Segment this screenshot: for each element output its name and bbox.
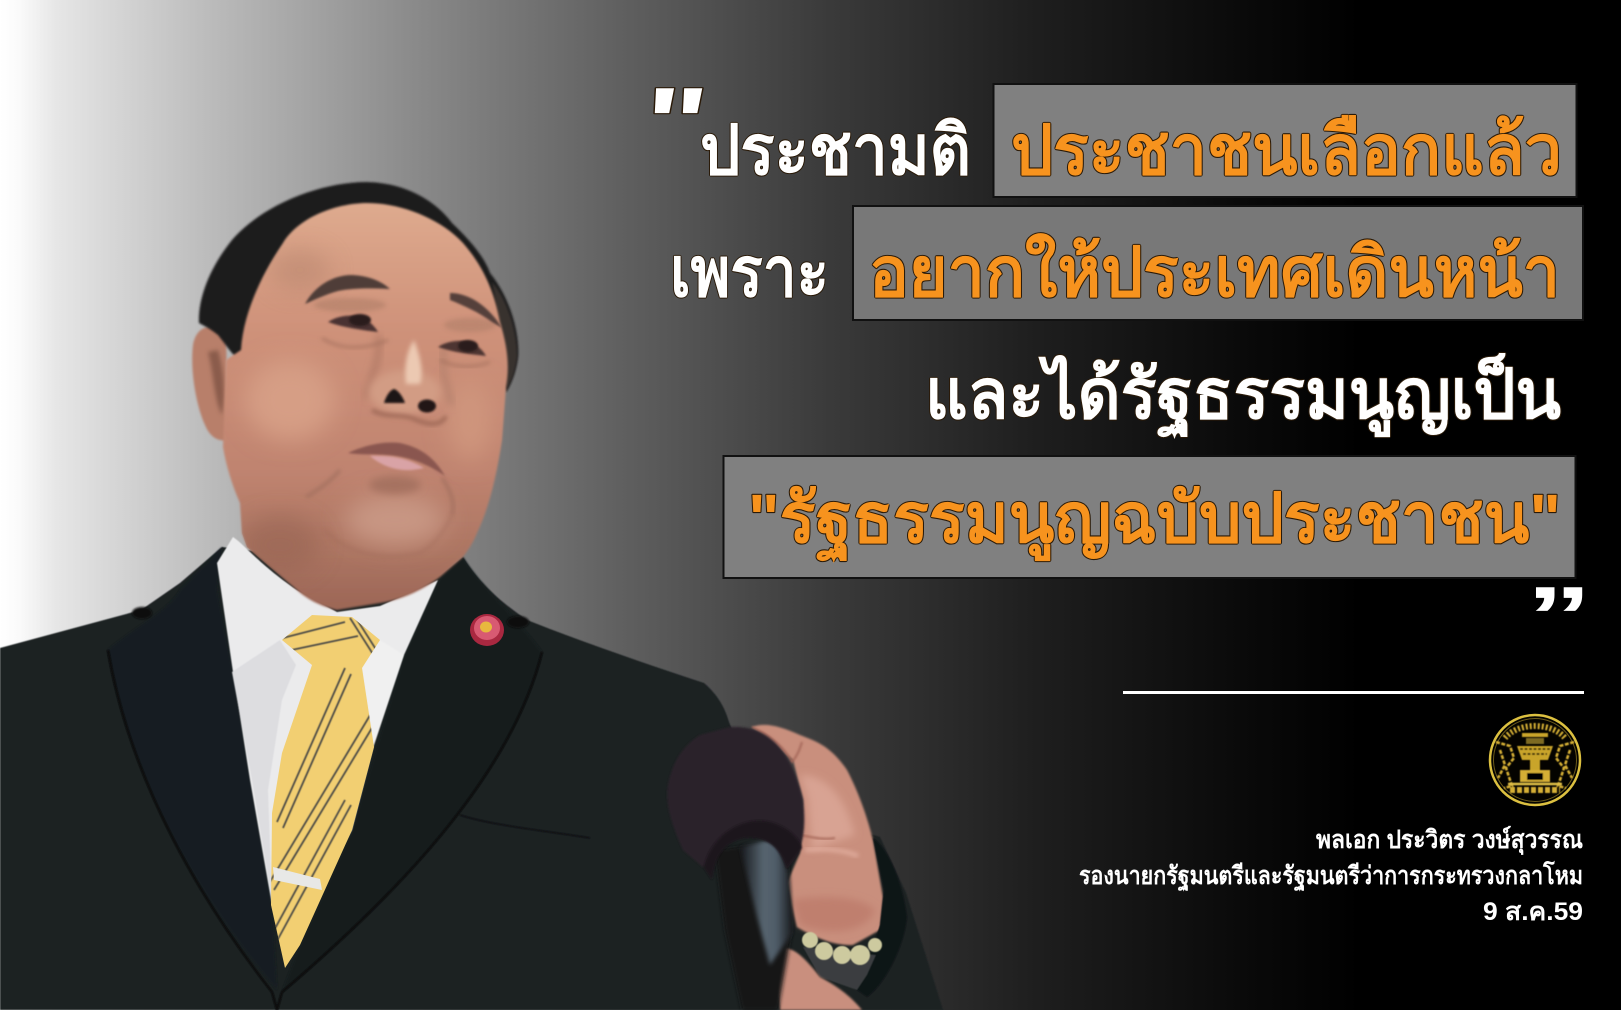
microphone handle <box>715 840 792 1010</box>
highlight box 2 <box>853 206 1583 320</box>
portrait photo of the speaker <box>0 182 943 1010</box>
seal: lions <box>1496 742 1574 788</box>
eye sockets <box>314 298 386 312</box>
icon: government seal <box>1490 715 1580 805</box>
nose <box>369 340 446 424</box>
nose side <box>366 335 379 398</box>
attribution <box>1079 825 1583 926</box>
facial shading <box>240 250 496 575</box>
highlighted phrase 1: ประชาชนเลือกแล้ว <box>1011 112 1562 189</box>
hand holding microphone <box>752 725 883 945</box>
hair <box>199 182 518 392</box>
highlighted phrase 3: "รัฐธรรมนูญฉบับประชาชน" <box>748 480 1561 563</box>
seal: top leaf arc <box>1505 726 1565 738</box>
shirt collar <box>217 537 438 930</box>
ear <box>192 326 228 440</box>
jaw crease <box>325 515 452 556</box>
cheek fold <box>306 470 340 497</box>
chin shadow below lip <box>369 476 421 494</box>
opening quotation mark: " <box>636 67 714 179</box>
lapel pin <box>470 614 504 646</box>
mouth <box>348 442 445 476</box>
closing quotation mark: ” <box>1526 569 1592 663</box>
necktie <box>266 615 384 968</box>
divider line <box>1123 691 1584 694</box>
headline quote <box>636 67 1592 663</box>
line 2 plain text: เพราะ <box>670 234 829 311</box>
tie clip <box>273 867 322 890</box>
face <box>223 203 508 610</box>
microphone <box>667 727 804 1010</box>
line 3 plain text: และได้รัฐธรรมนูญเป็น <box>925 353 1561 439</box>
suit jacket <box>0 547 943 1010</box>
line 1 plain text: ประชามติ <box>700 112 971 189</box>
eyes <box>328 314 486 356</box>
suit lapels <box>108 547 277 990</box>
bracelet beads <box>802 932 882 965</box>
lapel notches <box>132 607 152 619</box>
microphone foam <box>667 727 804 868</box>
watch band and bracelet <box>802 838 907 997</box>
eyebrows <box>305 275 390 304</box>
date: 9 ส.ค.59 <box>1483 898 1583 926</box>
highlight box 3 <box>724 456 1576 578</box>
seal: pedestal <box>1520 770 1550 782</box>
seal: urn <box>1517 733 1553 770</box>
lower fingers <box>773 948 862 1010</box>
highlighted phrase 2: อยากให้ประเทศเดินหน้า <box>869 232 1560 311</box>
lapel edge lines <box>108 650 590 1010</box>
highlight box 1 <box>994 84 1576 197</box>
speaker name: พลเอก ประวิตร วงษ์สุวรรณ <box>1316 825 1583 856</box>
